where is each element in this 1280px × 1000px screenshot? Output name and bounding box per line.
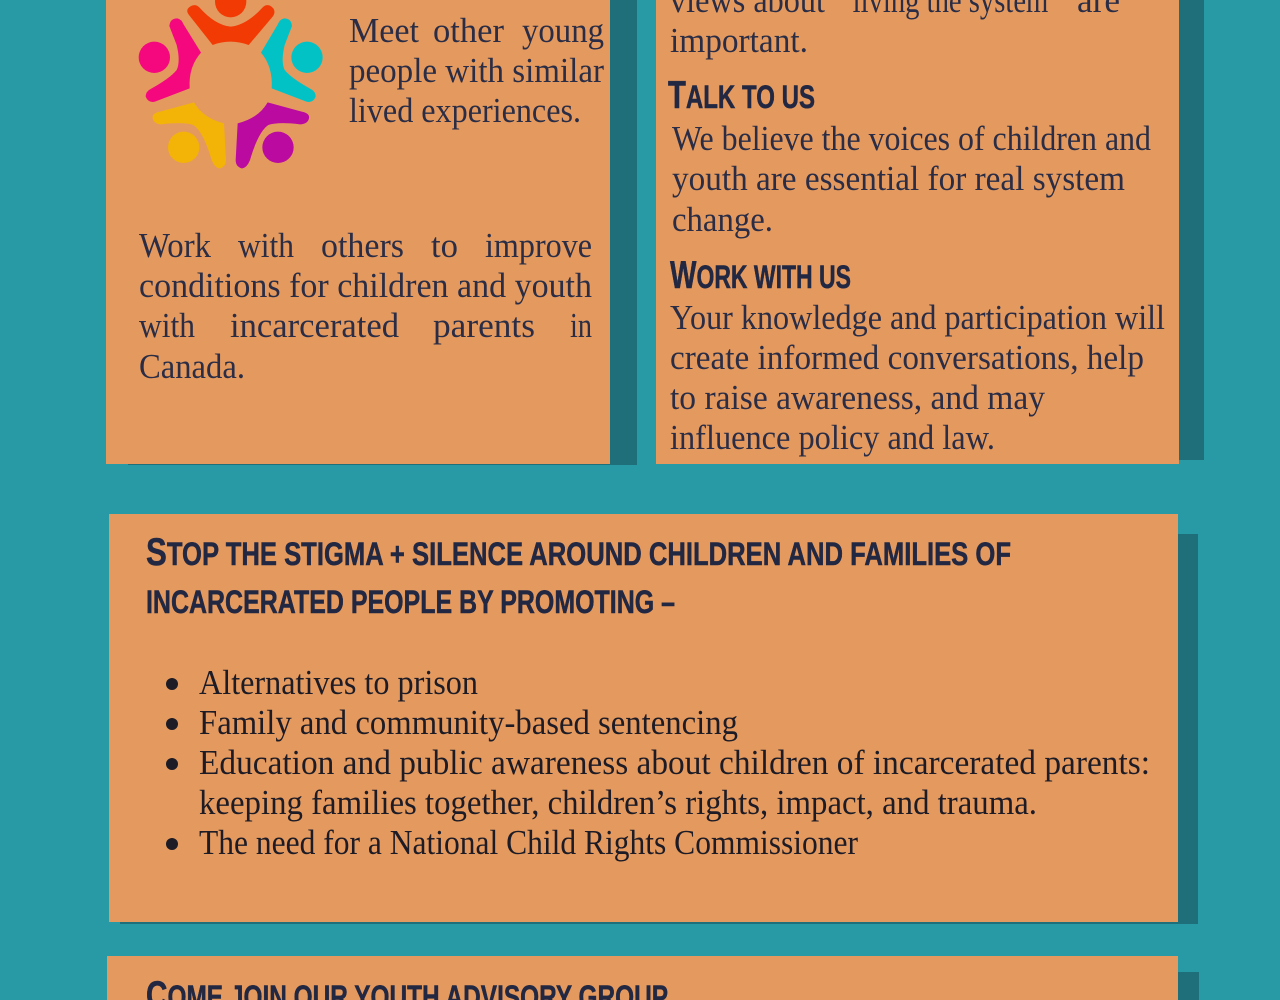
text: knowledge and participation: create informed conversations, help <box>670 338 1144 377</box>
text: work with others: improve <box>485 226 592 265</box>
text: work with others: Canada. <box>139 347 245 386</box>
panel: meet other young people <box>106 0 637 465</box>
text: work with others: in <box>570 306 592 345</box>
text: knowledge and participation: Your knowledge and participation will <box>670 298 1165 337</box>
bullet list: what to promote: keeping families together, children’s rights, impact, and trauma. <box>199 783 1037 822</box>
text: work with others: Work <box>139 226 211 265</box>
heading: stop the stigma and silence: INCARCERATED PEOPLE BY PROMOTING – <box>146 584 675 620</box>
panel: talk and work with us <box>656 0 1204 464</box>
text: meet other young people <box>349 11 604 130</box>
text: knowledge and participation <box>670 298 1165 457</box>
text: work with others: parents <box>433 306 535 345</box>
heading: stop the stigma and silence: STOP THE STIGMA + SILENCE AROUND CHILDREN AND FAMILIES OF <box>146 531 1011 574</box>
text: views about living the system <box>670 0 1120 60</box>
bullet list: what to promote: Family and community-based sentencing <box>199 703 738 742</box>
text: work with others: incarcerated <box>230 306 399 345</box>
heading: work with us: WORK WITH US <box>670 254 851 297</box>
text: meet other young people: other <box>433 11 504 50</box>
bullet list: what to promote <box>166 663 1150 862</box>
text: meet other young people: Meet <box>349 11 419 50</box>
bullet list: what to promote: Alternatives to prison <box>199 663 478 702</box>
text: views about living the system: important. <box>670 21 808 60</box>
panel: stop the stigma <box>109 514 1198 924</box>
text: meet other young people: young <box>522 11 604 50</box>
text: voices of children and youth <box>672 119 1151 239</box>
text: work with others: to <box>431 226 458 265</box>
text: voices of children and youth: youth are essential for real system <box>672 159 1125 198</box>
bullet list: what to promote: Education and public awareness about children of incarcerated parents: <box>199 743 1150 782</box>
text: knowledge and participation: to raise awareness, and may <box>670 378 1045 417</box>
text: meet other young people: lived experiences. <box>349 91 581 130</box>
heading: stop the stigma and silence <box>146 531 1011 620</box>
panel: come join our youth advisory group <box>107 956 1199 1000</box>
text: work with others: with <box>238 226 294 265</box>
text: knowledge and participation: influence policy and law. <box>670 418 995 457</box>
text: voices of children and youth: change. <box>672 200 773 239</box>
text: voices of children and youth: We believe the voices of children and <box>672 119 1151 158</box>
text: meet other young people: people with similar <box>349 51 604 90</box>
text: work with others: conditions for children and youth <box>139 266 592 305</box>
text: work with others: with <box>139 306 195 345</box>
text: work with others: others <box>321 226 404 265</box>
icon: circle of five people <box>139 0 323 168</box>
heading: talk to us: TALK TO US <box>668 74 815 117</box>
text: work with others <box>139 226 592 386</box>
bullet list: what to promote: The need for a National Child Rights Commissioner <box>199 823 858 862</box>
